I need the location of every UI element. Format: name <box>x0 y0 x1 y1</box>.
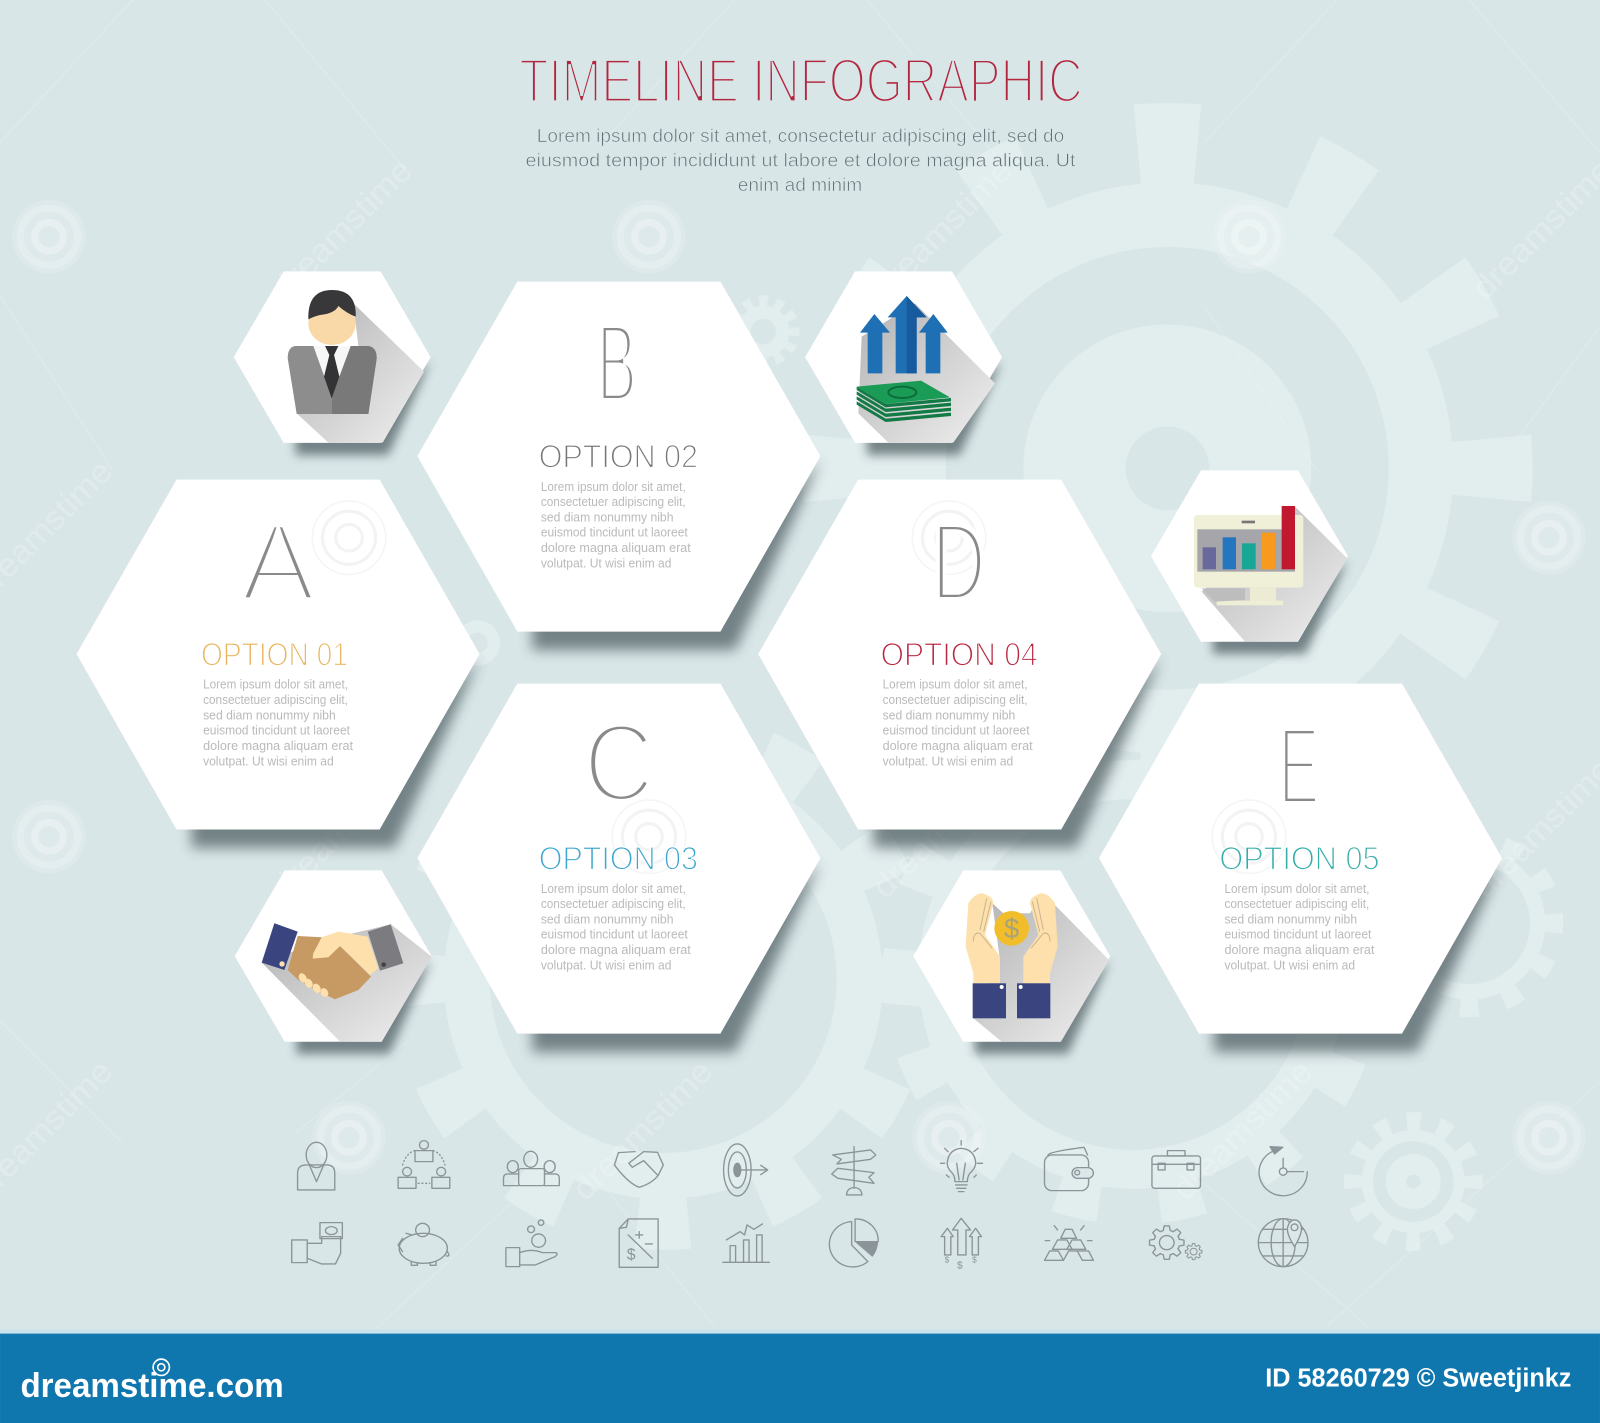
icon: businessman <box>288 290 424 443</box>
icon: handshake outline <box>614 1152 663 1187</box>
subtitle: enim ad minim <box>738 174 862 195</box>
icon: arrows and dollars: $ <box>957 1261 963 1272</box>
panel: icon hands and coin <box>913 870 1110 1054</box>
text block: Lorem ipsum dolor sit amet, <box>541 881 686 896</box>
background gears <box>421 148 1553 1241</box>
text block: consectetuer adipiscing elit, <box>203 692 348 707</box>
shadow <box>1214 862 1502 1052</box>
shadow <box>975 960 1110 1054</box>
hexagon <box>234 271 431 443</box>
gear: right edge <box>1386 840 1553 1007</box>
text block: volutpat. Ut wisi enim ad <box>203 753 334 768</box>
text block: Lorem ipsum dolor sit amet, <box>1224 881 1369 896</box>
gear: tiny near option A <box>461 627 494 659</box>
panel: icon monitor chart <box>1151 470 1348 654</box>
text block: volutpat. Ut wisi enim ad <box>541 555 671 570</box>
text block: consectetuer adipiscing elit, <box>541 494 686 509</box>
shadow <box>295 361 430 455</box>
icon: signpost <box>832 1147 876 1195</box>
icon: gears <box>1150 1226 1202 1260</box>
text block: consectetuer adipiscing elit, <box>541 896 686 911</box>
icon: hands holding coin <box>966 893 1109 1042</box>
watermark text: dreamstime <box>565 1052 719 1207</box>
hexagon <box>77 480 480 830</box>
watermark text <box>0 151 1600 1207</box>
shadow <box>1213 560 1347 654</box>
text block: volutpat. Ut wisi enim ad <box>1224 957 1355 972</box>
text block: euismod tincidunt ut laoreet <box>203 723 350 738</box>
text block: consectetuer adipiscing elit, <box>1224 896 1369 911</box>
watermark spiral <box>1212 800 1286 873</box>
panel: icon handshake <box>235 870 432 1054</box>
text block <box>541 479 691 570</box>
hexagon <box>417 282 820 632</box>
hexagon <box>805 271 1002 443</box>
panel: icon arrows and money <box>805 271 1002 455</box>
heading: OPTION 03 <box>539 839 698 876</box>
subtitle <box>526 125 1075 195</box>
text block: Lorem ipsum dolor sit amet, <box>203 677 348 692</box>
text block: Lorem ipsum dolor sit amet, <box>541 479 686 494</box>
text block <box>883 677 1033 768</box>
watermark spiral <box>612 800 686 873</box>
text block <box>541 881 691 972</box>
watermark text: dreamstime <box>265 750 419 905</box>
heading: OPTION 05 <box>1219 839 1380 876</box>
gear: tiny near option B <box>733 301 794 362</box>
icon: person <box>298 1142 335 1190</box>
icon: team <box>504 1151 559 1186</box>
text block <box>203 677 354 768</box>
icon: handshake <box>262 923 432 1042</box>
icon: piggy bank <box>398 1223 449 1265</box>
icon: pie chart <box>829 1219 878 1267</box>
icon: globe with pin <box>1258 1219 1308 1267</box>
icon: light bulb <box>941 1141 983 1192</box>
text block: sed diam nonummy nibh <box>203 707 336 722</box>
gear: lower centre <box>421 737 906 1222</box>
title: TIMELINE INFOGRAPHIC <box>519 47 1083 116</box>
logo text: dreamstime.com <box>20 1367 284 1405</box>
icon: document: $ <box>627 1247 636 1263</box>
text block <box>1224 881 1375 972</box>
shadow <box>296 960 431 1054</box>
text block: dolore magna aliquam erat <box>883 738 1033 753</box>
text block: consectetuer adipiscing elit, <box>883 692 1028 707</box>
text block: sed diam nonummy nibh <box>541 911 673 926</box>
letter E: E <box>1279 705 1319 828</box>
icon row left <box>292 1141 769 1267</box>
text block: dolore magna aliquam erat <box>541 942 691 957</box>
text block: euismod tincidunt ut laoreet <box>1224 927 1372 942</box>
shadow <box>873 658 1161 848</box>
text block: dolore magna aliquam erat <box>1224 942 1375 957</box>
icon: bar chart on monitor <box>1194 506 1347 642</box>
panel: option 04 <box>758 480 1161 848</box>
panel: option 05 <box>1099 684 1502 1052</box>
icon: arrows and dollars <box>941 1218 981 1272</box>
panel: option 02 <box>417 282 820 650</box>
hexagon <box>1099 684 1502 1034</box>
heading: OPTION 01 <box>201 635 348 672</box>
shadow <box>532 460 820 650</box>
letter C: C <box>584 702 654 825</box>
hexagon <box>1151 470 1348 642</box>
icon: target <box>724 1144 768 1196</box>
letter D: D <box>932 501 986 624</box>
watermark spiral <box>912 501 986 574</box>
icon: hand with money <box>292 1223 342 1264</box>
panel: option 03 <box>417 684 820 1052</box>
hexagon <box>758 480 1161 830</box>
text block: sed diam nonummy nibh <box>883 707 1015 722</box>
shadow <box>532 862 820 1052</box>
letter B: B <box>597 302 637 425</box>
text block: euismod tincidunt ut laoreet <box>541 525 688 540</box>
hexagon <box>417 684 820 1034</box>
icon: hand and coins <box>506 1220 557 1267</box>
icon: wallet <box>1045 1147 1093 1191</box>
footer bar <box>0 1330 1600 1423</box>
text block: Lorem ipsum dolor sit amet, <box>883 677 1028 692</box>
icon: growth bars <box>723 1224 769 1262</box>
icon: briefcase <box>1152 1151 1201 1188</box>
gear: large upper right <box>847 148 1488 789</box>
gear: lower right of centre <box>902 743 1364 1206</box>
icon: arrows and dollars: $ <box>972 1256 977 1265</box>
letter A: A <box>241 501 316 624</box>
watermark text: dreamstime <box>1164 1052 1319 1207</box>
watermark text: dreamstime <box>864 151 1019 306</box>
text block: euismod tincidunt ut laoreet <box>541 927 688 942</box>
subtitle: eiusmod tempor incididunt ut labore et dolore magna aliqua. Ut <box>526 149 1075 170</box>
panel: option 01 <box>77 480 480 848</box>
watermark text: dreamstime <box>864 750 1019 905</box>
image id: ID 58260729 © Sweetjinkz <box>1265 1365 1571 1393</box>
icon: arrows and dollars: $ <box>945 1256 950 1265</box>
text block: dolore magna aliquam erat <box>541 540 691 555</box>
text block: volutpat. Ut wisi enim ad <box>883 753 1013 768</box>
gear: small bottom right <box>1354 1122 1472 1241</box>
icon: document <box>619 1219 658 1267</box>
hexagon <box>235 870 432 1042</box>
shadow <box>867 361 1002 455</box>
watermark spirals <box>12 200 1586 1174</box>
text block: sed diam nonummy nibh <box>1224 911 1357 926</box>
text block: euismod tincidunt ut laoreet <box>883 723 1030 738</box>
icon row right <box>829 1141 1308 1272</box>
icon: clock arrow <box>1259 1147 1307 1196</box>
text block: volutpat. Ut wisi enim ad <box>541 957 671 972</box>
subtitle: Lorem ipsum dolor sit amet, consectetur adipiscing elit, sed do <box>537 125 1064 146</box>
icon: rising arrows over banknotes <box>857 296 995 443</box>
icon: gold bars <box>1045 1226 1093 1260</box>
text block: sed diam nonummy nibh <box>541 509 673 524</box>
hexagon <box>913 870 1110 1042</box>
panel: icon person <box>234 271 431 455</box>
watermark spiral <box>312 501 386 574</box>
icon: hands holding coin: $ <box>1004 913 1019 944</box>
watermark text: dreamstime <box>265 151 419 306</box>
icon: network <box>398 1141 450 1188</box>
logo spiral <box>153 1359 169 1375</box>
text block: dolore magna aliquam erat <box>203 738 354 753</box>
heading: OPTION 04 <box>881 635 1038 672</box>
shadow <box>191 658 479 848</box>
heading: OPTION 02 <box>539 437 698 474</box>
